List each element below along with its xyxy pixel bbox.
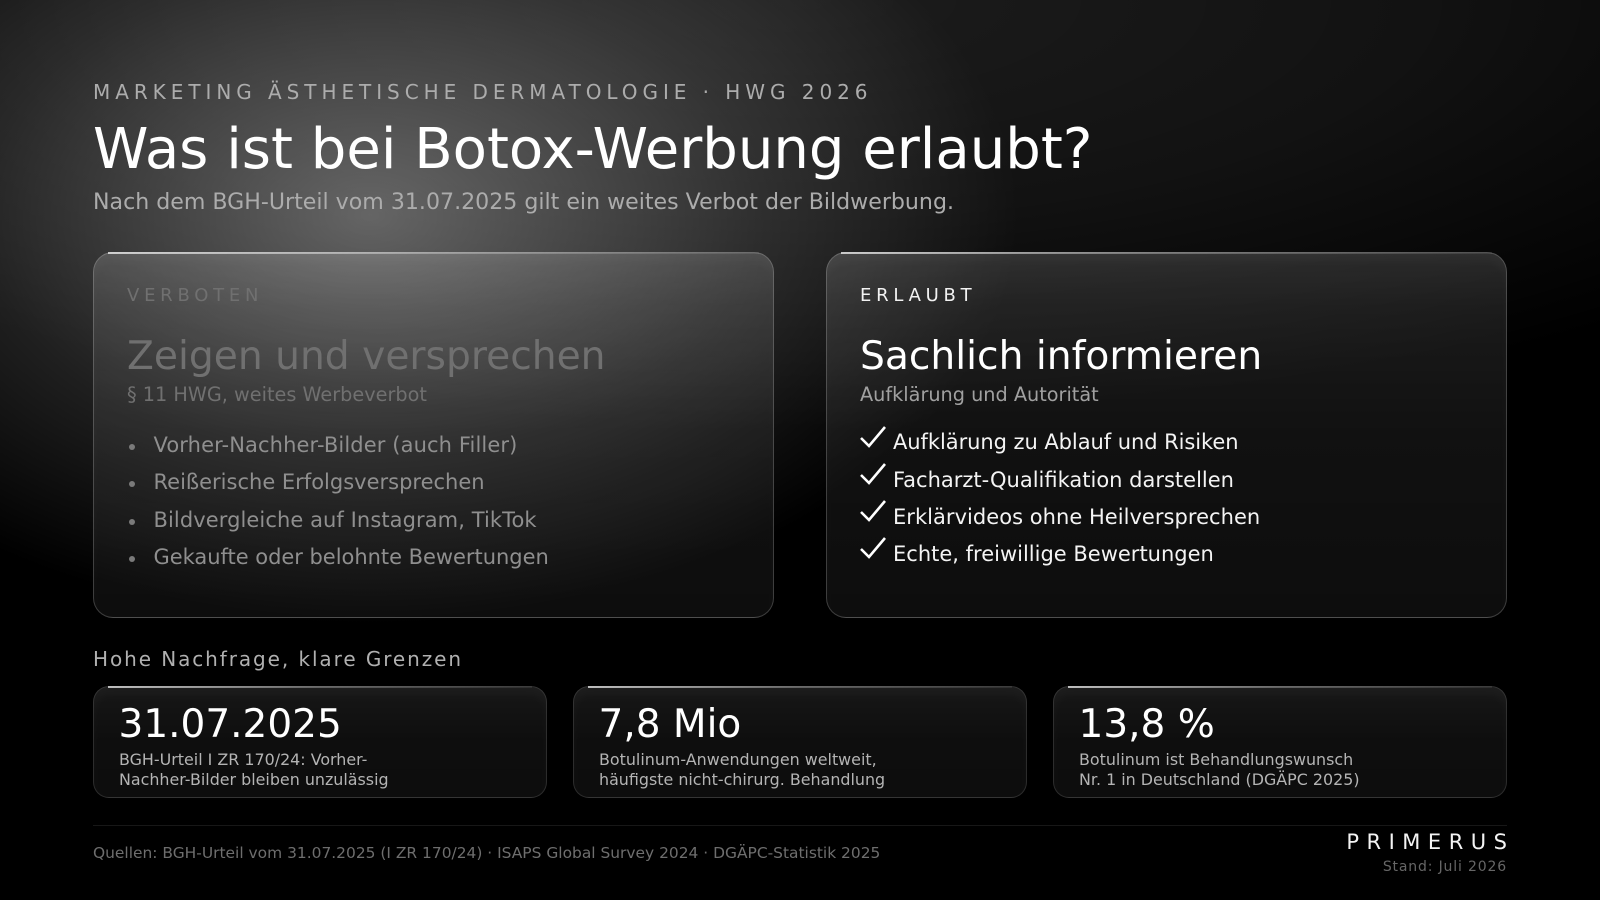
eyebrow: MARKETING ÄSTHETISCHE DERMATOLOGIE · HWG 2026 — [93, 80, 872, 104]
panel: erlaubt — [826, 252, 1507, 618]
title: Was ist bei Botox-Werbung erlaubt? — [93, 116, 1093, 182]
stat description: Nachher-Bilder bleiben unzulässig — [119, 770, 389, 788]
sources: Quellen: BGH-Urteil vom 31.07.2025 (I ZR 170/24) · ISAPS Global Survey 2024 · DGÄPC-Statistik 2025 — [93, 844, 880, 862]
panel label: verboten: VERBOTEN — [127, 285, 263, 306]
list: allowed items: Facharzt-Qualifikation darstellen — [893, 468, 1234, 492]
stat description: Nr. 1 in Deutschland (DGÄPC 2025) — [1079, 770, 1360, 788]
list: allowed items: Erklärvideos ohne Heilversprechen — [893, 505, 1260, 529]
panel heading: verboten: Zeigen und versprechen — [127, 334, 606, 379]
stat number: 13,8 % — [1078, 702, 1215, 747]
stat description — [599, 750, 885, 788]
list: forbidden items: Gekaufte oder belohnte Bewertungen — [154, 545, 549, 569]
panel: verboten — [93, 252, 774, 618]
icon: check — [860, 463, 886, 485]
list: allowed items: Echte, freiwillige Bewertungen — [893, 542, 1214, 566]
subtitle: Nach dem BGH-Urteil vom 31.07.2025 gilt ein weites Verbot der Bildwerbung. — [93, 189, 954, 215]
list: forbidden items — [129, 433, 549, 569]
list: allowed items — [860, 426, 1260, 566]
panel subheading: verboten: § 11 HWG, weites Werbeverbot — [127, 383, 427, 406]
section heading: Hohe Nachfrage, klare Grenzen — [93, 647, 463, 671]
stat description: BGH-Urteil I ZR 170/24: Vorher- — [119, 750, 367, 769]
icon: check — [860, 426, 886, 448]
stat number: 31.07.2025 — [118, 702, 342, 747]
stat description: Botulinum ist Behandlungswunsch — [1079, 750, 1353, 769]
stat card: share — [1053, 686, 1507, 798]
icon: check — [860, 500, 886, 522]
stat card: date — [93, 686, 547, 798]
stat description — [1079, 750, 1360, 788]
panel heading: erlaubt: Sachlich informieren — [860, 334, 1262, 379]
date: Stand: Juli 2026 — [1383, 859, 1507, 875]
list: allowed items: Aufklärung zu Ablauf und Risiken — [893, 430, 1239, 454]
icon: check — [860, 537, 886, 559]
stat description — [119, 750, 389, 788]
stat number: 7,8 Mio — [598, 702, 741, 747]
list: forbidden items: Reißerische Erfolgsversprechen — [154, 470, 485, 494]
stat description: Botulinum-Anwendungen weltweit, — [599, 750, 877, 769]
stat card: applications — [573, 686, 1027, 798]
stat description: häufigste nicht-chirurg. Behandlung — [599, 770, 885, 788]
list: forbidden items: Vorher-Nachher-Bilder (auch Filler) — [154, 433, 517, 457]
panel subheading: erlaubt: Aufklärung und Autorität — [860, 383, 1099, 406]
panel label: erlaubt: ERLAUBT — [860, 285, 976, 306]
list: forbidden items: Bildvergleiche auf Instagram, TikTok — [154, 508, 537, 532]
brand: PRIMERUS — [1346, 830, 1514, 854]
